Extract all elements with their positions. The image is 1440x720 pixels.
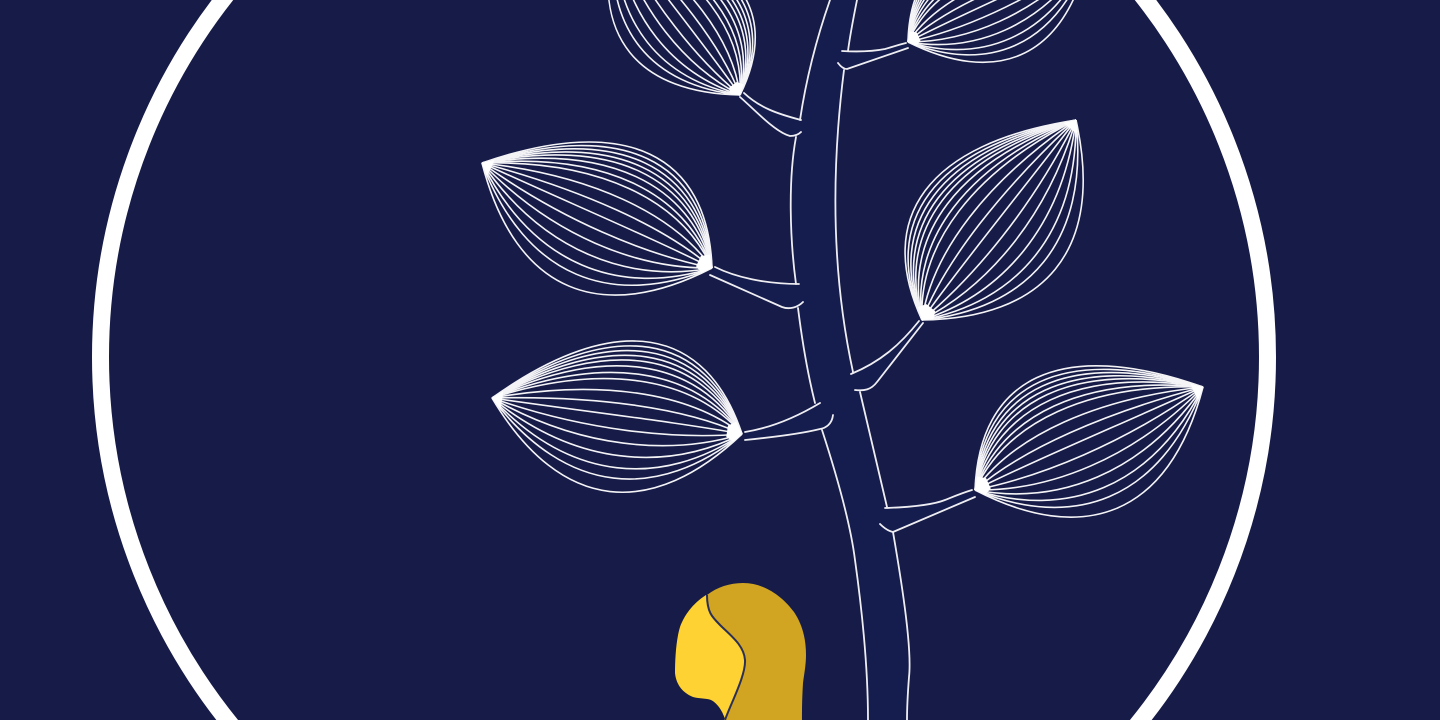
plant stem fill [710,0,975,720]
hair divider line [707,595,745,720]
leaf: lower right [943,317,1234,558]
leaf: top right [882,0,1114,96]
figure: yellow hair [675,583,806,720]
hair back: darker yellow [707,583,806,720]
leaf: lower left [481,321,753,509]
leaf: top left [565,0,791,133]
leaf: middle left [450,92,744,337]
stem and branch outlines [710,0,975,720]
leaf: middle right [862,73,1135,366]
hair front: bright yellow [675,595,745,719]
